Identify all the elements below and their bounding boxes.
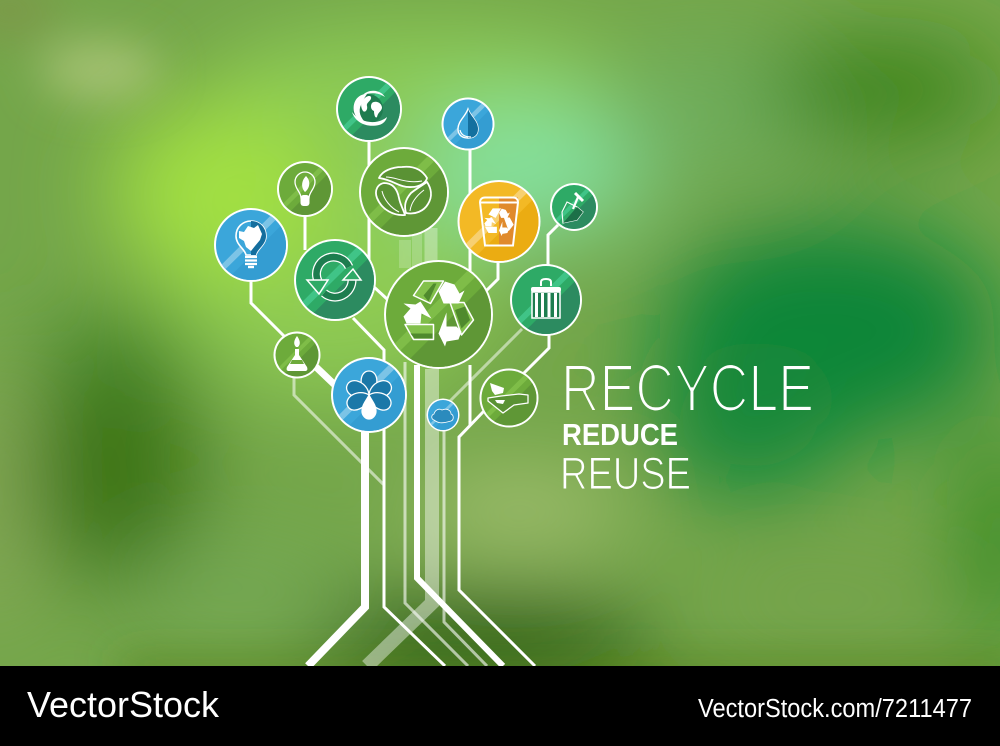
- circle: yellow recycling bin: [458, 180, 540, 263]
- circle: hand holding leaf: [480, 368, 538, 428]
- thick centre trunk: [417, 365, 503, 666]
- faint line from cloud circle: [444, 430, 487, 666]
- circle: small bulb with leaf: [277, 161, 333, 217]
- globe and leaves connector: [368, 140, 370, 262]
- thick left trunk: [308, 430, 365, 666]
- tree trunk and circuit branches: [251, 140, 558, 666]
- recycle to hand connector: [468, 365, 472, 425]
- circle: flower and drop: [331, 357, 407, 433]
- circle: circular arrows: [294, 239, 376, 321]
- circle: trash can: [510, 264, 582, 336]
- REDUCE: REDUCE: [562, 417, 678, 452]
- arrows to recycle connector: [374, 287, 387, 299]
- right trunk line from hand circle: [459, 411, 535, 666]
- circle: three leaves: [359, 147, 449, 237]
- icon: circular arrows: [307, 257, 361, 297]
- icon: flower: [344, 371, 394, 419]
- icon: globe: [352, 91, 387, 126]
- circle: globe: [336, 76, 402, 142]
- icon: recycling bin: [480, 198, 518, 246]
- small bulb connector: [304, 215, 306, 250]
- icon: shovel: [562, 193, 583, 223]
- faint trunk line: [405, 362, 468, 666]
- footer bar: [0, 666, 1000, 746]
- faint line from flask: [294, 376, 384, 485]
- icon: flask with sprout: [287, 336, 307, 371]
- icon: leaf bulb: [295, 172, 315, 206]
- icon: recycling arrows: [404, 281, 474, 346]
- image reference: VectorStock.com/7211477: [698, 695, 972, 723]
- translucent upper bands: [405, 225, 431, 270]
- blue bulb connector: [251, 280, 284, 336]
- circle: chemistry flask: [274, 332, 320, 378]
- headline text: [560, 351, 814, 499]
- circle: water drop: [442, 98, 494, 150]
- icon: three leaves: [376, 167, 431, 215]
- VectorStock logo: VectorStock: [27, 684, 220, 725]
- REUSE: REUSE: [560, 448, 691, 499]
- icon: hand with leaf: [488, 383, 528, 413]
- flask to flower connector: [316, 367, 338, 388]
- trash to hand connector: [524, 333, 549, 373]
- icon: water drop: [458, 109, 478, 138]
- translucent central band: [367, 369, 432, 666]
- shovel to trash connector: [548, 225, 558, 266]
- circle: shovel: [550, 183, 598, 231]
- RECYCLE: RECYCLE: [561, 351, 814, 426]
- yellow bin to recycle connector: [485, 262, 498, 292]
- icon: trash can: [531, 279, 561, 318]
- icon: earth bulb: [236, 221, 266, 267]
- circle: blue light bulb: [214, 208, 288, 282]
- circle: cloud: [426, 398, 460, 432]
- drop to recycle connector: [468, 148, 472, 272]
- circle: main recycle symbol: [384, 260, 493, 369]
- faint line from cloud to trash: [449, 329, 522, 402]
- thin trunk line from arrows circle: [353, 318, 445, 666]
- icon: cloud: [432, 409, 453, 423]
